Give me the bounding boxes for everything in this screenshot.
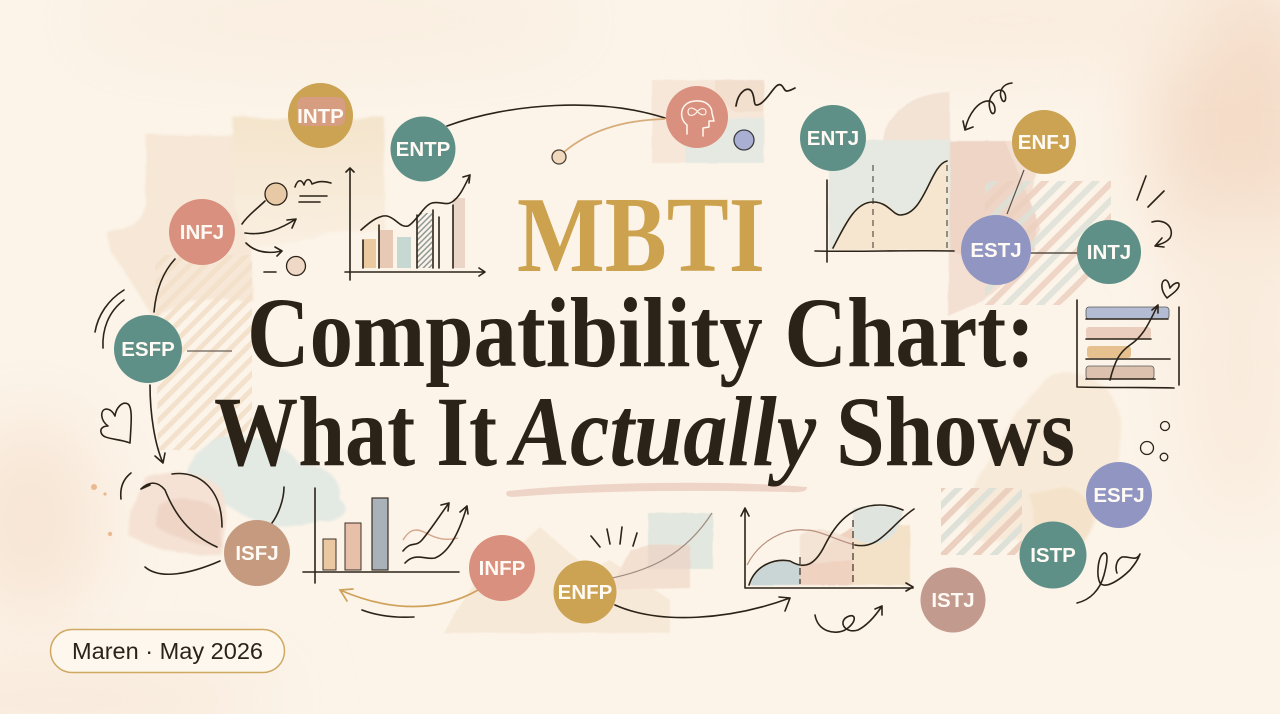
- squiggle: ISTP flourish: [1077, 553, 1140, 603]
- badge: ESTJ: ESTJ: [970, 239, 1022, 262]
- ISFJ sketch lines: [91, 473, 284, 574]
- badge: ENFP: ENFP: [558, 581, 612, 604]
- connectors: ENFJ ESTJ INTJ: [1007, 170, 1078, 253]
- INFJ sketch notes: [242, 180, 331, 276]
- badge: ESFP: [114, 315, 182, 383]
- squiggle: [736, 85, 795, 106]
- badge: author and date: Maren · May 2026: [72, 638, 263, 664]
- badge: ISFJ: [224, 520, 290, 586]
- watercolor wash: teal and peach lower left: [127, 437, 347, 555]
- badge: INFP: [469, 535, 535, 601]
- chart: lower right area chart: [741, 505, 914, 591]
- connector: tan arc to node: [564, 119, 665, 152]
- watercolor panel: lower center shapes: [443, 513, 713, 633]
- badge: author and date: [50, 630, 284, 672]
- hatch panel: lower right: [941, 488, 1022, 555]
- badge: INTJ: [1077, 220, 1141, 284]
- hatch panel: left: [155, 255, 252, 450]
- badge: INFJ: INFJ: [180, 221, 224, 244]
- node: tan dot: [552, 150, 566, 164]
- curl arrow bottom: [815, 606, 882, 632]
- panel: upper right chart washes: [829, 92, 1040, 316]
- badge: ISTP: [1020, 522, 1086, 588]
- connectors around ESFP: [95, 259, 232, 463]
- badge: ENFP: [554, 560, 616, 624]
- badge: ISTJ: ISTJ: [931, 589, 975, 612]
- badge: INTP: [288, 83, 353, 148]
- watercolor wash: right side: [966, 373, 1120, 552]
- ENFP ticks and lines: [591, 513, 790, 618]
- icon: heart left: [101, 403, 131, 443]
- title: What It Actually Shows: Shows: [836, 376, 1075, 487]
- badge: INFP: INFP: [479, 557, 525, 580]
- circles: bubbles right: [1140, 422, 1170, 461]
- chart: upper left bar chart: [345, 168, 485, 280]
- title: Compatibility Chart: Compatibility Chart:: [247, 277, 1035, 388]
- badge: ENFJ: [1012, 110, 1076, 174]
- icon: heart right: [1162, 280, 1179, 298]
- connector: black arc to brain: [447, 105, 665, 126]
- badge: ESFJ: [1086, 462, 1152, 528]
- badge: ISFJ: ISFJ: [235, 542, 279, 565]
- watercolor wash: upper left: [106, 118, 385, 320]
- panel: brain illustration: [447, 80, 795, 164]
- curl arrow upper right: [963, 83, 1012, 130]
- underline brush: [507, 484, 806, 496]
- icon: blue dot: [734, 130, 754, 150]
- arrow: INFP gold sweep: [340, 589, 478, 617]
- badge: ISTJ: [920, 568, 986, 632]
- ticks and arrow near INTJ: [1137, 176, 1171, 247]
- badge: ENTJ: [800, 105, 866, 171]
- title: What It Actually Shows: Actually: [506, 376, 817, 487]
- hatch panel: upper right: [985, 181, 1111, 305]
- badge: ENTP: [390, 116, 456, 182]
- badge: ESFP: ESFP: [121, 338, 175, 361]
- chart: lower left bar chart: [303, 488, 468, 583]
- badge: INTP: INTP: [297, 105, 344, 128]
- badge: ENTJ: ENTJ: [807, 127, 859, 150]
- chart: upper right line chart: [815, 161, 954, 262]
- badge: ENFJ: ENFJ: [1018, 131, 1070, 154]
- title: What It Actually Shows: What It: [214, 376, 497, 487]
- badge: INFJ: [169, 199, 235, 265]
- badge: ENTP: ENTP: [396, 138, 450, 161]
- title: What It Actually Shows: [214, 376, 1075, 487]
- title: MBTI: MBTI: [517, 176, 765, 295]
- badge: ESTJ: [961, 215, 1031, 285]
- badge: INTJ: INTJ: [1087, 241, 1131, 264]
- badge: ISTP: ISTP: [1030, 544, 1076, 567]
- badge: ESFJ: ESFJ: [1093, 484, 1145, 507]
- chart: horizontal bars: [1077, 300, 1179, 388]
- icon: brain head in circle: [666, 86, 728, 148]
